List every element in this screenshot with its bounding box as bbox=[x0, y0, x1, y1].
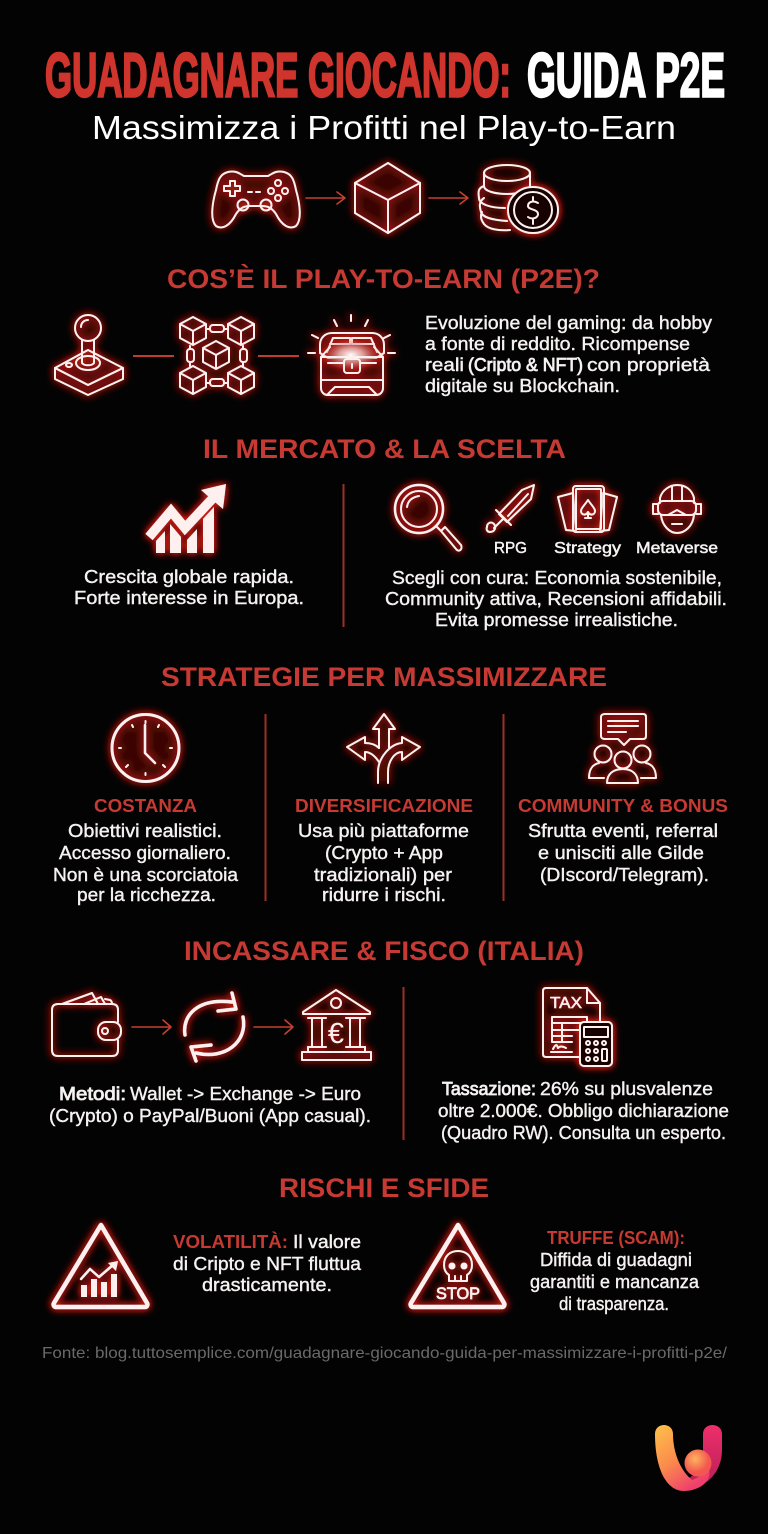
arrow: exchange to bank bbox=[254, 1020, 293, 1034]
text block: growth: Forte interesse in Europa. bbox=[74, 587, 304, 608]
arrow: wallet to exchange bbox=[132, 1020, 171, 1034]
icon: tax form and calculator: TAX bbox=[550, 995, 582, 1012]
heading: cash out and taxes: INCASSARE & FISCO (ITALIA) bbox=[184, 936, 584, 966]
icon: blockchain cube bbox=[355, 163, 420, 233]
icon: community bbox=[589, 714, 656, 783]
text block: volatility: drasticamente. bbox=[202, 1274, 332, 1295]
panel: diversificazione: DIVERSIFICAZIONE bbox=[295, 795, 473, 816]
panel: diversificazione bbox=[295, 795, 473, 905]
icon: joystick bbox=[55, 315, 123, 395]
icon: bank with euro bbox=[302, 990, 371, 1060]
icon: treasure chest bbox=[308, 315, 395, 395]
panel: diversificazione: (Crypto + App bbox=[325, 842, 443, 863]
icon: game controller bbox=[212, 171, 300, 228]
panel: diversificazione: ridurre i rischi. bbox=[322, 884, 446, 905]
icon: scam stop warning: STOP bbox=[436, 1284, 480, 1303]
text block: cash-out methods: Wallet -> Exchange -> Euro bbox=[130, 1083, 361, 1104]
icon: bank with euro: € bbox=[328, 1018, 344, 1050]
icon: tax form and calculator bbox=[543, 988, 612, 1066]
panel: community and bonus bbox=[518, 795, 728, 885]
subtitle: Massimizza i Profitti nel Play-to-Earn bbox=[92, 109, 676, 146]
logo bbox=[655, 1425, 722, 1491]
label: Metaverse: Metaverse bbox=[636, 540, 718, 557]
text block: scams: TRUFFE (SCAM): bbox=[547, 1228, 685, 1248]
icon: diverging arrows bbox=[347, 714, 420, 783]
panel: costanza bbox=[53, 795, 239, 905]
icon: exchange cycle bbox=[185, 993, 244, 1061]
panel: diversificazione: tradizionali) per bbox=[314, 864, 452, 885]
text block: taxation: 26% su plusvalenze bbox=[540, 1078, 713, 1099]
text block: scams: garantiti e mancanza bbox=[530, 1271, 700, 1292]
text block: volatility bbox=[173, 1231, 362, 1295]
label: RPG: RPG bbox=[494, 540, 527, 557]
text block: taxation bbox=[438, 1078, 729, 1143]
text block: how to choose: Scegli con cura: Economia sostenibile, bbox=[392, 567, 722, 588]
arrow: cube to coins bbox=[429, 192, 468, 204]
icon: blockchain network bbox=[180, 317, 254, 394]
text block: cash-out methods: Metodi: bbox=[59, 1083, 126, 1104]
heading: risks: RISCHI E SFIDE bbox=[279, 1173, 489, 1203]
icon: volatility warning bbox=[54, 1225, 147, 1307]
panel: community and bonus: (DIscord/Telegram). bbox=[540, 864, 709, 885]
text block: how to choose: Community attiva, Recensioni affidabili. bbox=[385, 588, 727, 609]
text block: scams bbox=[530, 1228, 700, 1314]
text block: P2E description bbox=[425, 312, 713, 396]
heading: what is P2E: COS’È IL PLAY-TO-EARN (P2E)? bbox=[167, 263, 600, 294]
panel: community and bonus: e unisciti alle Gilde bbox=[538, 842, 704, 863]
arrow: controller to cube bbox=[306, 192, 345, 204]
icon: VR headset bbox=[653, 485, 701, 533]
icon: scam stop warning bbox=[411, 1225, 504, 1307]
panel: costanza: Accesso giornaliero. bbox=[59, 842, 231, 863]
text block: volatility: Il valore bbox=[293, 1231, 361, 1252]
text block: how to choose: Evita promesse irrealistiche. bbox=[435, 609, 678, 630]
icon: magnifier bbox=[395, 485, 462, 551]
text block: P2E description: Evoluzione del gaming: da hobby bbox=[425, 312, 713, 333]
panel: costanza: per la ricchezza. bbox=[77, 884, 216, 905]
panel: community and bonus: Sfrutta eventi, referral bbox=[528, 820, 718, 841]
text block: cash-out methods: (Crypto) o PayPal/Buoni (App casual). bbox=[49, 1105, 371, 1126]
text block: cash-out methods bbox=[49, 1083, 371, 1126]
text block: scams: di trasparenza. bbox=[559, 1293, 669, 1314]
text block: P2E description: a fonte di reddito. Ricompense bbox=[425, 333, 690, 354]
panel: diversificazione: Usa più piattaforme bbox=[298, 820, 469, 841]
panel: costanza: COSTANZA bbox=[94, 795, 197, 816]
icon: growth chart bbox=[149, 484, 226, 553]
icon: playing cards bbox=[558, 486, 617, 532]
icon: sword bbox=[487, 485, 534, 532]
text block: volatility: VOLATILITÀ: bbox=[173, 1231, 288, 1252]
label: Strategy: Strategy bbox=[554, 540, 621, 557]
text block: growth bbox=[74, 566, 304, 608]
text block: taxation: oltre 2.000€. Obbligo dichiarazione bbox=[438, 1100, 729, 1121]
icon: clock bbox=[112, 714, 179, 782]
panel: community and bonus: COMMUNITY & BONUS bbox=[518, 795, 728, 816]
text block: volatility: di Cripto e NFT fluttua bbox=[173, 1253, 362, 1274]
heading: market: IL MERCATO & LA SCELTA bbox=[203, 434, 566, 464]
connector bbox=[133, 355, 174, 357]
text block: scams: Diffida di guadagni bbox=[540, 1249, 692, 1270]
panel: costanza: Obiettivi realistici. bbox=[68, 820, 222, 841]
icon: wallet bbox=[52, 993, 121, 1056]
icon: coins bbox=[479, 165, 558, 233]
source line: Fonte: blog.tuttosemplice.com/guadagnare-giocando-guida-per-massimizzare-i-profitti-p2e/ bbox=[42, 1345, 728, 1362]
text block: growth: Crescita globale rapida. bbox=[84, 566, 294, 587]
connector bbox=[258, 355, 299, 357]
text block: P2E description: digitale su Blockchain. bbox=[425, 375, 620, 396]
text block: P2E description: reali bbox=[425, 354, 464, 375]
heading: strategies: STRATEGIE PER MASSIMIZZARE bbox=[161, 662, 607, 692]
panel: costanza: Non è una scorciatoia bbox=[53, 864, 239, 885]
text block: how to choose bbox=[385, 567, 727, 630]
text block: taxation: Tassazione: bbox=[442, 1078, 536, 1099]
text block: P2E description: con proprietà bbox=[587, 354, 711, 375]
text block: P2E description: (Cripto & NFT) bbox=[468, 354, 583, 375]
text block: taxation: (Quadro RW). Consulta un esperto. bbox=[441, 1122, 726, 1143]
